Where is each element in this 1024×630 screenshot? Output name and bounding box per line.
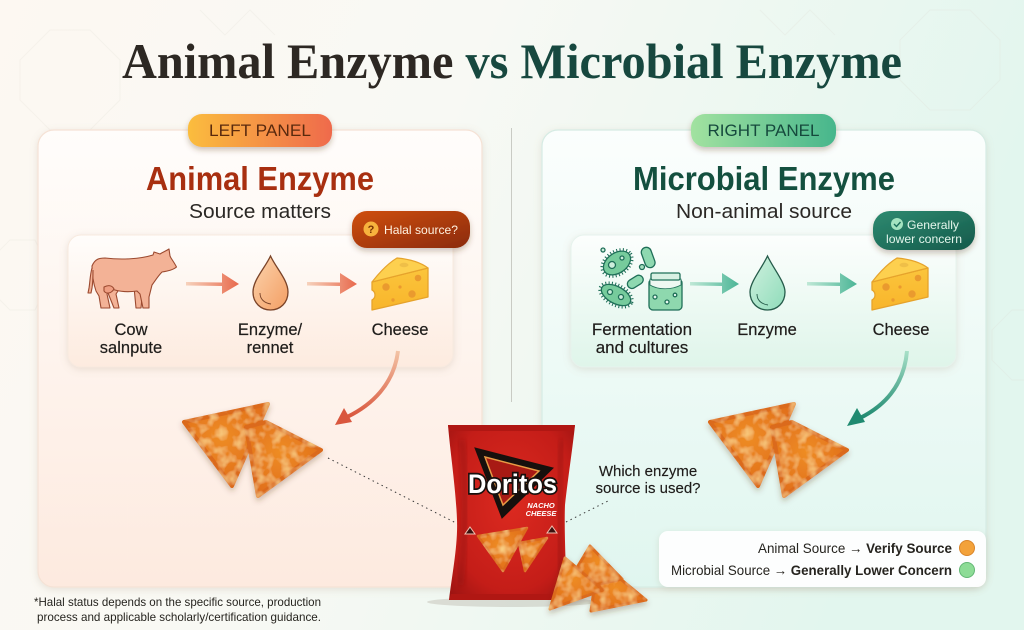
callout: generally lower concern: lower concern <box>886 232 962 246</box>
bag flavour text: CHEESE <box>526 509 557 518</box>
footnote: process and applicable scholarly/certification guidance. <box>37 610 321 624</box>
question text: Which enzyme <box>599 463 697 480</box>
curved arrow: cheese to chips <box>847 351 907 426</box>
panel: animal enzyme <box>38 114 482 587</box>
panel: microbial enzyme <box>542 114 986 587</box>
label: cheese: Cheese <box>873 321 929 339</box>
title: Animal Enzyme vs Microbial Enzyme <box>122 33 902 89</box>
label: cow: salnpute <box>100 339 162 357</box>
legend row: animal source: Animal Source → Verify Source <box>758 540 952 556</box>
footnote: *Halal status depends on the specific source, production <box>34 595 321 609</box>
left panel subheading: Source matters <box>189 201 331 223</box>
right panel subheading: Non-animal source <box>676 201 852 223</box>
right panel badge <box>691 114 836 147</box>
label: fermentation and cultures: Fermentation <box>592 320 692 339</box>
left panel badge <box>188 114 332 147</box>
bag flavour text: NACHO <box>527 501 555 510</box>
loose chips <box>550 546 646 611</box>
icon: cheese <box>872 258 928 310</box>
label: cow: Cow <box>114 321 148 339</box>
dotted connector: question to bag <box>566 500 610 522</box>
right panel badge: RIGHT PANEL <box>708 122 820 140</box>
label: cheese: Cheese <box>372 321 428 339</box>
callout: halal source <box>352 211 470 248</box>
legend <box>659 531 986 587</box>
icon: cheese <box>372 258 428 310</box>
callout: generally lower concern <box>873 211 975 250</box>
bag logo text: Doritos <box>468 469 557 499</box>
chips: animal panel <box>184 404 321 496</box>
icon: enzyme drop <box>253 256 288 310</box>
curved arrow: cheese to chips <box>335 351 398 425</box>
label: enzyme/rennet: Enzyme/ <box>238 321 303 339</box>
arrow: cow to enzyme <box>186 273 239 294</box>
label: fermentation and cultures: and cultures <box>596 338 688 357</box>
callout: generally lower concern: Generally <box>907 218 959 232</box>
icon: enzyme drop <box>750 256 785 310</box>
chips: microbial panel <box>710 404 847 496</box>
left panel badge: LEFT PANEL <box>209 122 311 140</box>
bag triangles <box>465 527 475 534</box>
flow box: microbial <box>571 235 956 367</box>
doritos bag <box>427 425 597 607</box>
callout: halal source: ? <box>368 224 375 236</box>
callout: halal source: Halal source? <box>384 223 458 237</box>
arrow: enzyme to cheese <box>807 273 857 294</box>
label: enzyme: Enzyme <box>737 321 797 339</box>
legend row: microbial source: Microbial Source → Generally Lower Concern <box>671 562 952 578</box>
label: enzyme/rennet: rennet <box>247 339 294 357</box>
bag chips <box>478 528 547 571</box>
question text: source is used? <box>595 480 701 497</box>
center divider <box>510 128 512 402</box>
left panel heading: Animal Enzyme <box>146 160 374 197</box>
bag logo triangle <box>475 448 553 518</box>
flow box: animal <box>68 235 453 367</box>
icon: cow <box>88 249 176 308</box>
arrow: enzyme to cheese <box>307 273 357 294</box>
arrow: cultures to enzyme <box>690 273 739 294</box>
icon: microbes and jar <box>597 245 682 311</box>
dotted connector: left chips to bag <box>328 458 458 524</box>
right panel heading: Microbial Enzyme <box>633 160 895 197</box>
